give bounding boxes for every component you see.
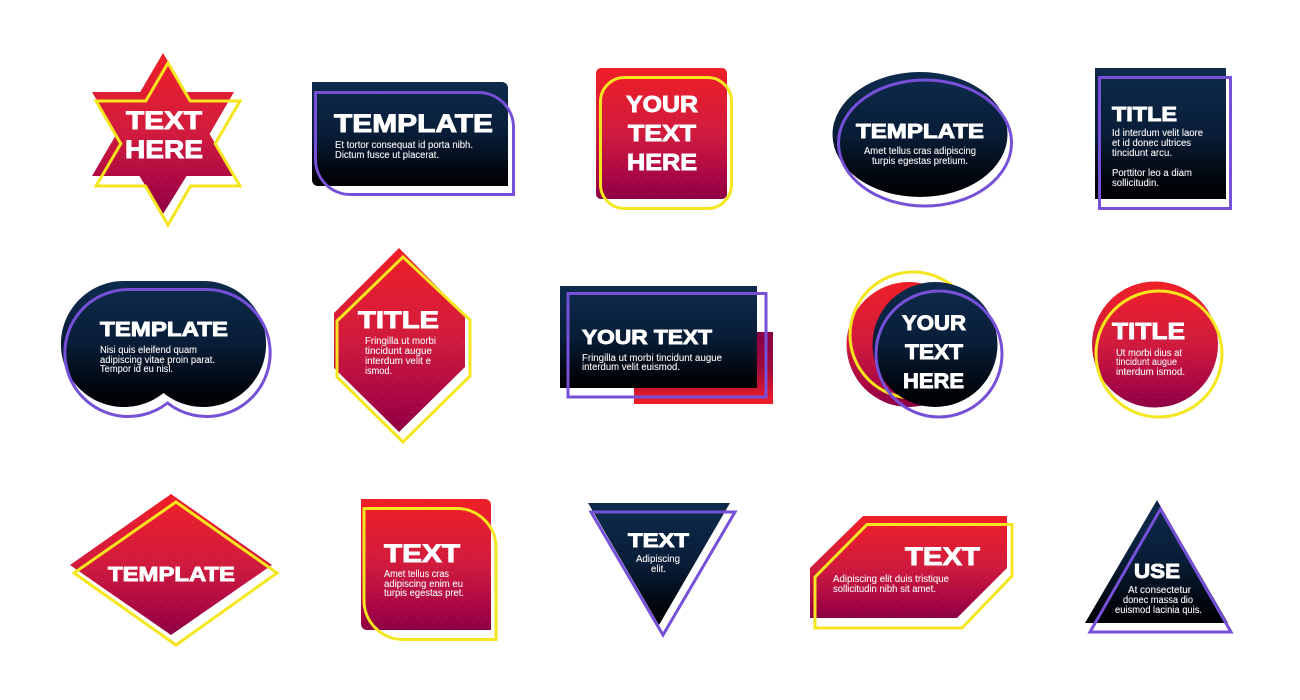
circle text: interdum ismod. bbox=[1116, 367, 1185, 378]
triangle text: euismod lacinia quis. bbox=[1115, 605, 1202, 616]
rectangle fill bbox=[312, 82, 508, 186]
card: rounded square TEXT bbox=[361, 499, 496, 640]
square text: TITLE bbox=[1112, 103, 1177, 126]
card: square TITLE bbox=[1095, 68, 1230, 208]
square text: et id donec ultrices bbox=[1112, 138, 1191, 149]
lobe text: adipiscing vitae proin parat. bbox=[100, 355, 215, 366]
rectangle text: Et tortor consequat id porta nibh. bbox=[335, 140, 473, 151]
star text: TEXT bbox=[126, 107, 202, 135]
card text bbox=[626, 91, 698, 175]
diamond text: TEMPLATE bbox=[108, 563, 235, 586]
chamfered text: Adipiscing elit duis tristique bbox=[833, 574, 949, 585]
hexagon outline bbox=[337, 257, 470, 442]
ellipse text: turpis egestas pretium. bbox=[872, 156, 968, 167]
circle text: TEXT bbox=[905, 341, 963, 364]
banner: chamfered TEXT bbox=[810, 516, 1012, 628]
star outline bbox=[96, 63, 240, 225]
card text bbox=[384, 540, 464, 599]
triangle text bbox=[1115, 560, 1202, 616]
rectangle text: YOUR TEXT bbox=[582, 326, 713, 349]
lobe fill bbox=[61, 281, 266, 407]
rear red circle bbox=[846, 282, 972, 407]
chamfered text: sollicitudin nibh sit amet. bbox=[833, 584, 936, 595]
diamond outline bbox=[74, 502, 277, 645]
square text: tincidunt arcu. bbox=[1112, 148, 1172, 159]
triangle text bbox=[628, 530, 689, 575]
card text: TEXT bbox=[628, 120, 696, 146]
chamfered text: TEXT bbox=[905, 543, 980, 571]
card text: Amet tellus cras bbox=[384, 569, 449, 580]
front dark rectangle bbox=[560, 286, 757, 388]
badge: inverted triangle TEXT bbox=[588, 503, 735, 635]
chamfered fill bbox=[810, 516, 1007, 618]
badge: circle TITLE bbox=[1092, 282, 1222, 417]
lobe text: Nisi quis eleifend quam bbox=[100, 345, 197, 356]
rectangle text: Fringilla ut morbi tincidunt augue bbox=[582, 353, 722, 364]
card text: YOUR bbox=[626, 91, 698, 117]
card fill bbox=[596, 68, 727, 199]
ellipse fill bbox=[832, 72, 1008, 197]
hexagon text: Fringilla ut morbi bbox=[365, 336, 436, 347]
square fill bbox=[1095, 68, 1226, 199]
rectangle outline bbox=[315, 92, 514, 195]
banner: offset rectangles YOUR TEXT bbox=[560, 286, 773, 404]
diamond fill bbox=[70, 494, 272, 635]
rectangle outline bbox=[568, 294, 766, 397]
hexagon text bbox=[358, 307, 439, 377]
card text: HERE bbox=[627, 149, 697, 175]
card fill bbox=[361, 499, 491, 630]
triangle outline bbox=[591, 512, 735, 635]
triangle fill bbox=[1085, 500, 1228, 623]
card text: turpis egestas pret. bbox=[384, 588, 464, 599]
yellow circle outline bbox=[850, 272, 976, 398]
star fill bbox=[92, 53, 234, 214]
badge: double lobe TEMPLATE bbox=[61, 281, 270, 416]
rectangle text bbox=[582, 326, 722, 373]
hexagon text: interdum velit e bbox=[365, 356, 431, 367]
badge: ellipse TEMPLATE bbox=[832, 72, 1012, 206]
front dark circle bbox=[872, 282, 998, 407]
triangle text: TEXT bbox=[628, 530, 689, 552]
rear red rectangle bbox=[634, 332, 773, 404]
badge: hexagon TITLE bbox=[334, 248, 470, 442]
square text bbox=[1112, 103, 1203, 189]
card outline bbox=[600, 78, 732, 208]
hexagon text: tincidunt augue bbox=[365, 346, 432, 357]
circle text bbox=[1112, 318, 1185, 378]
ellipse text: TEMPLATE bbox=[856, 121, 984, 143]
square text: Porttitor leo a diam bbox=[1112, 168, 1192, 179]
circle text: HERE bbox=[903, 370, 964, 393]
hexagon text: TITLE bbox=[358, 307, 439, 334]
triangle text: elit. bbox=[651, 564, 666, 575]
triangle text: Adipiscing bbox=[636, 554, 680, 565]
ellipse text: Amet tellus cras adipiscing bbox=[864, 146, 976, 157]
badge: triangle USE bbox=[1085, 500, 1231, 632]
badge: overlapping circles YOUR TEXT HERE bbox=[846, 272, 1002, 417]
card text: adipiscing enim eu bbox=[384, 579, 463, 590]
badge: diamond TEMPLATE bbox=[70, 494, 277, 645]
circle fill bbox=[1092, 282, 1218, 408]
ellipse text bbox=[856, 121, 984, 167]
triangle text: At consectetur bbox=[1128, 585, 1192, 596]
lobe text: TEMPLATE bbox=[100, 318, 228, 341]
rectangle text: TEMPLATE bbox=[334, 110, 493, 138]
circle text: Ut morbi dius at bbox=[1116, 348, 1182, 359]
card text: TEXT bbox=[384, 540, 460, 568]
rectangle text: interdum velit euismod. bbox=[582, 362, 680, 373]
circle text: YOUR bbox=[902, 312, 966, 335]
hexagon fill bbox=[334, 248, 465, 432]
lobe text bbox=[100, 318, 228, 375]
chamfered outline bbox=[815, 524, 1012, 628]
triangle text: USE bbox=[1134, 560, 1180, 583]
purple circle outline bbox=[876, 291, 1002, 417]
hexagon text: ismod. bbox=[365, 366, 392, 377]
card: square YOUR TEXT HERE bbox=[596, 68, 732, 208]
circle text: tincidunt augue bbox=[1116, 357, 1177, 368]
banner: rounded rectangle TEMPLATE bbox=[312, 82, 514, 195]
ellipse outline bbox=[838, 80, 1012, 206]
square text: Id interdum velit laore bbox=[1112, 128, 1203, 139]
lobe outline bbox=[65, 290, 270, 416]
square text: sollicitudin. bbox=[1112, 178, 1159, 189]
card outline bbox=[364, 508, 496, 640]
badge: star TEXT HERE bbox=[92, 53, 240, 225]
triangle text: donec massa dio bbox=[1123, 595, 1193, 606]
star text bbox=[125, 107, 203, 164]
circle text: TITLE bbox=[1112, 318, 1185, 344]
rectangle text bbox=[334, 110, 493, 161]
rectangle text: Dictum fusce ut placerat. bbox=[335, 150, 439, 161]
lobe text: Tempor id eu nisl. bbox=[100, 364, 173, 375]
triangle outline bbox=[1090, 509, 1231, 632]
circle outline bbox=[1096, 291, 1222, 417]
triangle fill bbox=[588, 503, 730, 625]
chamfered text bbox=[833, 543, 980, 595]
circle text bbox=[902, 312, 966, 393]
square outline bbox=[1100, 78, 1230, 208]
star text: HERE bbox=[125, 136, 203, 164]
